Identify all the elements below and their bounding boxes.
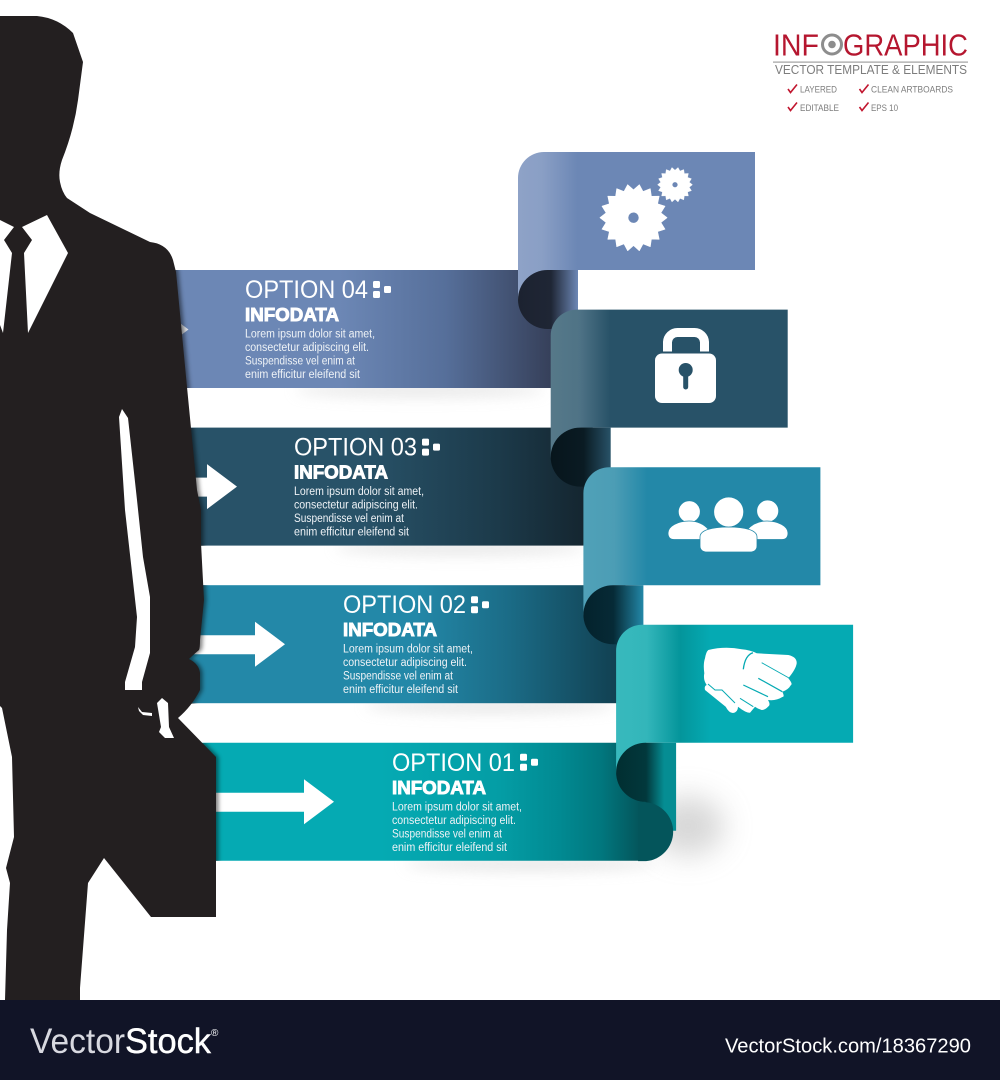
icon: squares 02 [471,596,489,613]
heading: option 02: OPTION 02 [343,591,466,619]
logo wordmark: GRAPHIC [843,28,968,62]
body text 03: enim efficitur eleifend sit [294,527,410,539]
footer brand: Vector [30,1022,125,1061]
icon: group of people [668,497,788,552]
subheading: infodata 03: INFODATA [294,462,388,483]
body text 04: consectetur adipiscing elit. [245,342,369,354]
footer bar: ® [211,1028,219,1039]
silhouette edge shadow [176,270,222,861]
body text 04: Lorem ipsum dolor sit amet, [245,328,375,340]
arrow 02 [165,622,285,667]
body text 04: Suspendisse vel enim at [245,356,356,368]
body text 01: consectetur adipiscing elit. [392,815,516,827]
body text 03: Lorem ipsum dolor sit amet, [294,486,424,498]
heading: option 01: OPTION 01 [392,749,515,777]
body text 03 [294,486,424,539]
body text 01: Suspendisse vel enim at [392,828,503,840]
body text 02: enim efficitur eleifend sit [343,684,459,696]
bar 01 [198,743,646,861]
arrow 01 [198,779,334,824]
body text 02: consectetur adipiscing elit. [343,657,467,669]
ribbon: option 02 [165,467,820,703]
icon: squares 04 [373,281,391,298]
icon: squares 03 [422,439,440,456]
collar and shirt [0,215,68,333]
ribbon: option 04 [100,152,755,388]
logo subtitle: VECTOR TEMPLATE & ELEMENTS [775,63,967,77]
subheading: infodata 02: INFODATA [343,619,437,640]
subheading: infodata 01: INFODATA [392,777,486,798]
body text 04: enim efficitur eleifend sit [245,369,361,381]
heading: option 04: OPTION 04 [245,276,368,304]
heading: option 03: OPTION 03 [294,434,417,462]
icon: padlock [655,332,716,403]
body text 04 [245,328,375,381]
logo target ring [822,35,842,54]
body text 01: Lorem ipsum dolor sit amet, [392,801,522,813]
bar 03 [133,428,593,546]
icon: squares 01 [520,754,538,771]
footer url: VectorStock.com/18367290 [725,1036,971,1058]
footer bar [0,1000,1000,1080]
bar 04 [100,270,560,388]
arrow 04 [100,307,188,352]
checklist [788,84,953,113]
briefcase handle gaps [138,698,174,738]
body text 02 [343,644,473,696]
subheading: infodata 04: INFODATA [245,304,339,325]
rounded ribbon end [638,802,673,861]
panel 02 [583,467,820,615]
icon: handshake [704,648,797,713]
logo wordmark [773,28,968,62]
body text 02: Lorem ipsum dolor sit amet, [343,644,473,656]
body text 03: Suspendisse vel enim at [294,513,405,525]
ribbon: option 01 [198,625,853,861]
panel 04 [518,152,755,300]
fold 03 [551,428,611,487]
businessman silhouette [0,16,216,1000]
body text 02: Suspendisse vel enim at [343,671,454,683]
checklist: LAYERED [800,84,837,94]
arm gap [119,409,150,690]
panel 01 [616,625,853,773]
fold 02 [583,585,643,644]
fold 04 [518,270,578,329]
fold 01 [616,743,676,831]
checklist: CLEAN ARTBOARDS [871,84,953,94]
footer bar: Stock [125,1022,211,1061]
checklist: EDITABLE [800,103,839,113]
body text 01 [392,801,522,854]
body text 01: enim efficitur eleifend sit [392,842,508,854]
ribbon: option 03 [133,310,788,546]
checklist: EPS 10 [871,103,898,113]
panel 03 [551,310,788,458]
arrow 03 [133,464,237,509]
logo wordmark: INF [773,28,819,62]
body text 03: consectetur adipiscing elit. [294,500,418,512]
header logo [773,28,968,113]
soft shadows under ribbons [295,383,724,871]
bar 02 [165,585,625,703]
icon: gears [600,167,692,251]
